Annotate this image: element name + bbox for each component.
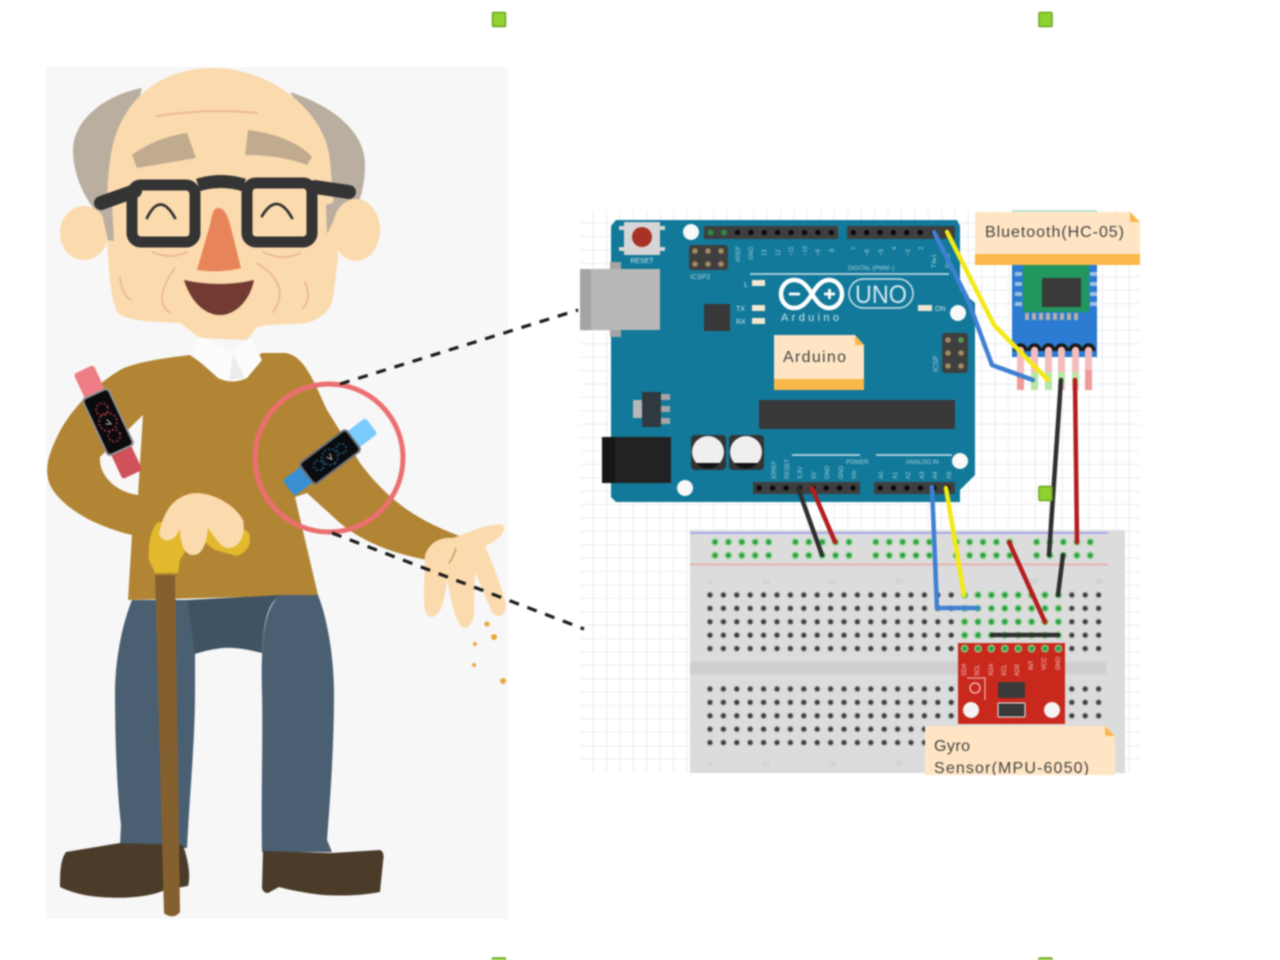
note: arduino: Arduino [783, 349, 846, 366]
active breadboard holes [958, 588, 1065, 655]
board silkscreen text: Vin [852, 470, 858, 479]
breadboard: 5 [708, 761, 712, 768]
cane shaft [155, 575, 180, 916]
gyro sensor board: INT [1029, 660, 1035, 670]
palm crease [449, 548, 456, 563]
board silkscreen text: ANALOG IN [906, 460, 939, 466]
board silkscreen text: ICSP2 [690, 274, 710, 281]
board silkscreen text: A3 [920, 471, 926, 479]
board silkscreen text: ICSP [933, 355, 940, 372]
breadboard: 15 [828, 579, 836, 586]
board silkscreen text: GND [839, 465, 845, 479]
pin headers [704, 226, 955, 494]
board silkscreen text: 5V [812, 472, 818, 479]
note: arduino [774, 335, 864, 390]
bluetooth module [1012, 210, 1097, 390]
board silkscreen text: ~6 [865, 248, 871, 256]
board silkscreen text: 12 [776, 249, 782, 256]
smiling eyes [147, 204, 292, 218]
power jack [602, 437, 671, 483]
collar [190, 337, 262, 382]
red power wires [812, 380, 1077, 622]
note: gyro sensor: Gyro [934, 738, 970, 755]
left shoe [60, 843, 189, 898]
gyro sensor board: GND [1056, 656, 1062, 670]
board silkscreen text: 8 [830, 248, 836, 252]
dashed callout lines [332, 310, 584, 629]
gyro sensor board: SDA [962, 664, 968, 676]
board silkscreen text: 7 [852, 246, 858, 250]
trouser seat [187, 595, 282, 654]
board silkscreen text: ~3 [906, 248, 912, 256]
board silkscreen text [690, 245, 953, 479]
face wrinkles [120, 111, 308, 313]
gyro sensor board: XDA [989, 664, 995, 676]
cane handle [149, 522, 250, 573]
gyro sensor board: SCL [975, 664, 981, 676]
board silkscreen text: ~11 [789, 246, 795, 256]
board silkscreen text: AREF [736, 246, 742, 262]
highlight ring [255, 384, 403, 532]
usb port [580, 262, 660, 337]
breadboard: 20 [895, 761, 903, 768]
note: bluetooth: Bluetooth(HC-05) [985, 224, 1124, 241]
breadboard: 10 [762, 761, 770, 768]
board silkscreen text: A1 [893, 471, 899, 479]
collar shading [229, 353, 245, 380]
board silkscreen text: POWER [846, 460, 869, 466]
panel background [46, 67, 508, 919]
open hand [424, 524, 506, 628]
nose [197, 208, 241, 271]
glasses [101, 182, 349, 242]
gyro sensor board: XCL [1002, 664, 1008, 676]
gyro sensor board: VCC [1042, 657, 1048, 670]
status leds: L [744, 282, 748, 289]
voltage regulator [633, 392, 670, 427]
breadboard: 15 [828, 761, 836, 768]
note: bluetooth [975, 212, 1140, 265]
sweater [47, 353, 465, 600]
arduino uno logo [781, 279, 913, 324]
grid background [580, 210, 1140, 772]
eyebrows [132, 130, 312, 168]
status leds: ON [935, 306, 946, 313]
board silkscreen text: RESET [785, 459, 791, 479]
gripping hand [159, 493, 244, 555]
right trouser [262, 595, 334, 852]
board silkscreen text: GND [749, 246, 755, 260]
blue signal wires [932, 232, 1033, 608]
watch on right arm [70, 363, 146, 481]
board silkscreen text: 2 [919, 246, 925, 250]
falling crumbs [472, 621, 506, 684]
board silkscreen text: 13 [762, 249, 768, 256]
black ground wires [798, 380, 1063, 635]
head and neck [107, 68, 338, 340]
status leds [736, 280, 946, 326]
mouth [184, 280, 254, 315]
status leds: RX [736, 319, 746, 326]
right shoe [262, 850, 384, 896]
board silkscreen text: TX▸1 [932, 253, 938, 268]
arduino uno logo: UNO [855, 281, 907, 309]
breadboard: 20 [895, 579, 903, 586]
note: gyro sensor: Sensor(MPU-6050) [934, 760, 1089, 777]
wires [798, 232, 1077, 635]
board silkscreen text: RX◂0 [946, 253, 952, 268]
breadboard: 5 [708, 579, 712, 586]
watch on left arm, highlighted [280, 415, 380, 499]
ears [60, 199, 380, 261]
arduino board [580, 220, 975, 502]
arduino uno logo: Arduino [781, 312, 839, 324]
selection handles [492, 12, 1052, 960]
module pins [1015, 345, 1094, 390]
board silkscreen text: ~9 [816, 248, 822, 256]
board silkscreen text: DIGITAL (PWM~) [848, 266, 895, 272]
board silkscreen text: 3.3V [798, 467, 804, 479]
note: gyro sensor [925, 726, 1115, 777]
sideburns [100, 200, 340, 241]
header sockets [704, 226, 955, 494]
gyro sensor board [958, 643, 1065, 724]
yellow signal wires [946, 232, 1048, 595]
board silkscreen text: 4 [892, 246, 898, 250]
reset button: RESET [630, 258, 654, 265]
board silkscreen text: A0 [879, 471, 885, 479]
board silkscreen text: A4 [933, 471, 939, 479]
breadboard [690, 530, 1125, 773]
icsp headers [689, 245, 968, 373]
panel: circuit diagram [580, 210, 1140, 777]
reset button [619, 222, 665, 265]
board silkscreen text: GND [825, 465, 831, 479]
board silkscreen text: ~10 [803, 245, 809, 256]
connection handle [1039, 486, 1052, 500]
breadboard: 35 [1095, 579, 1103, 586]
capacitors [691, 435, 764, 470]
board silkscreen text: ~5 [879, 248, 885, 256]
panel: elderly man illustration [46, 67, 508, 919]
status leds: TX [736, 306, 745, 313]
hair [73, 88, 365, 240]
left trouser [115, 600, 195, 848]
board silkscreen text: A2 [906, 471, 912, 479]
mounting holes [677, 224, 968, 496]
breadboard: 10 [762, 579, 770, 586]
silkscreen rules [750, 274, 952, 455]
chips [704, 304, 955, 429]
board silkscreen text: A5 [947, 471, 953, 479]
gyro sensor board: AD0 [1015, 664, 1021, 676]
breadboard: 30 [1030, 579, 1038, 586]
board silkscreen text: IOREF [772, 460, 778, 479]
